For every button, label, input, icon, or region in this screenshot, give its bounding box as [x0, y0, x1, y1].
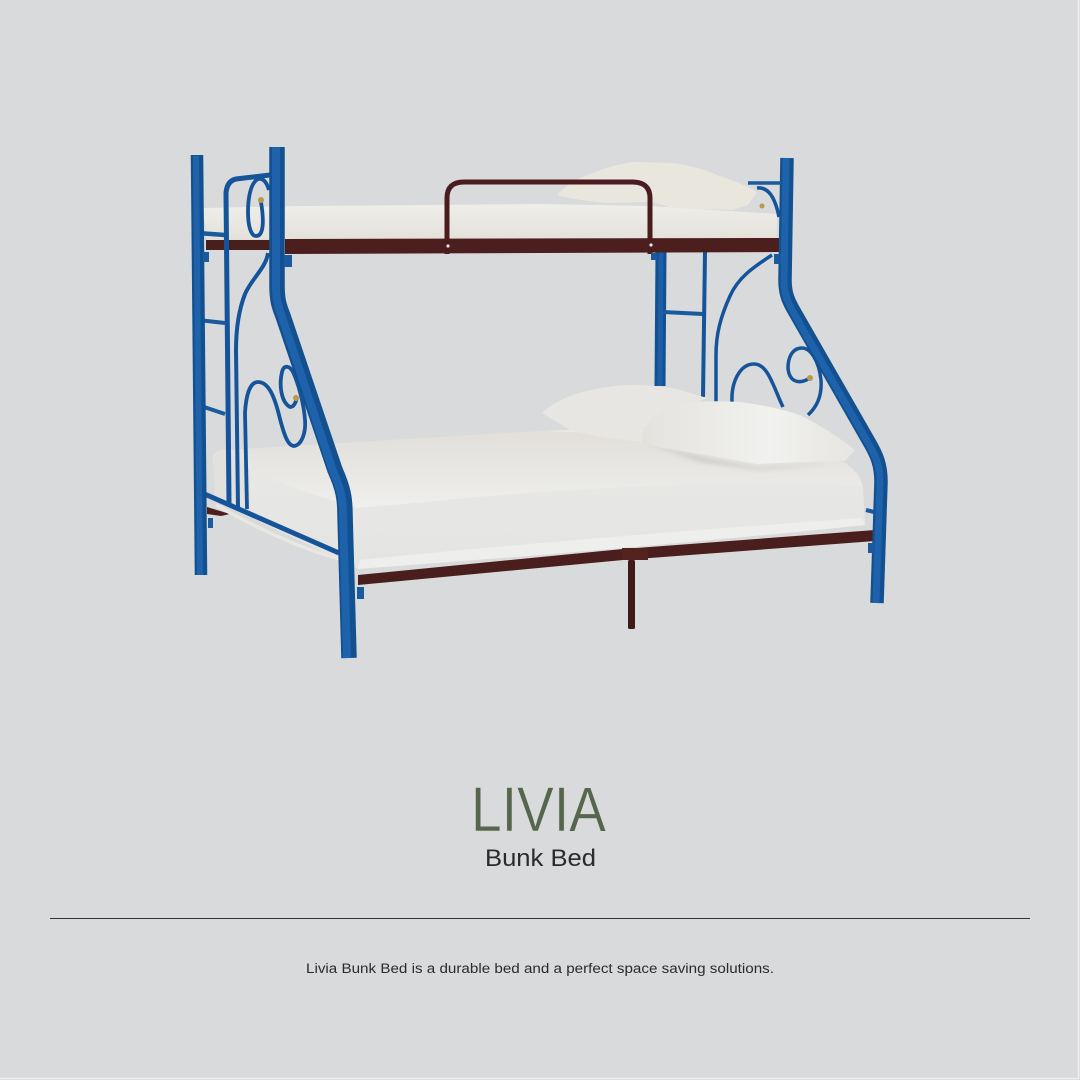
left front post [276, 147, 349, 658]
bunk bed illustration [196, 147, 881, 658]
top right headboard bars [748, 183, 874, 512]
subtitle: Bunk Bed: Bunk Bed [485, 845, 596, 872]
blue brackets [203, 252, 875, 599]
title: LIVIA: LIVIA [471, 775, 606, 845]
left headboard ladder and scrollwork [197, 175, 339, 559]
description text: Livia Bunk Bed is a durable bed and a perfect space saving solutions. [306, 961, 774, 976]
divider line [50, 918, 1030, 919]
lower bed brown rail [207, 507, 875, 629]
guard rail [446, 182, 653, 254]
upper pillow [557, 162, 757, 210]
upper bed brown rail [206, 238, 781, 254]
rear right ladder and scrollwork [660, 252, 821, 415]
upper mattress [203, 204, 777, 240]
shadow under front pillow [645, 443, 845, 470]
left rear post [196, 155, 201, 575]
right front post [784, 158, 881, 603]
lower pillow back [542, 385, 707, 442]
lower mattress [213, 430, 865, 569]
lower pillow front [642, 401, 855, 464]
